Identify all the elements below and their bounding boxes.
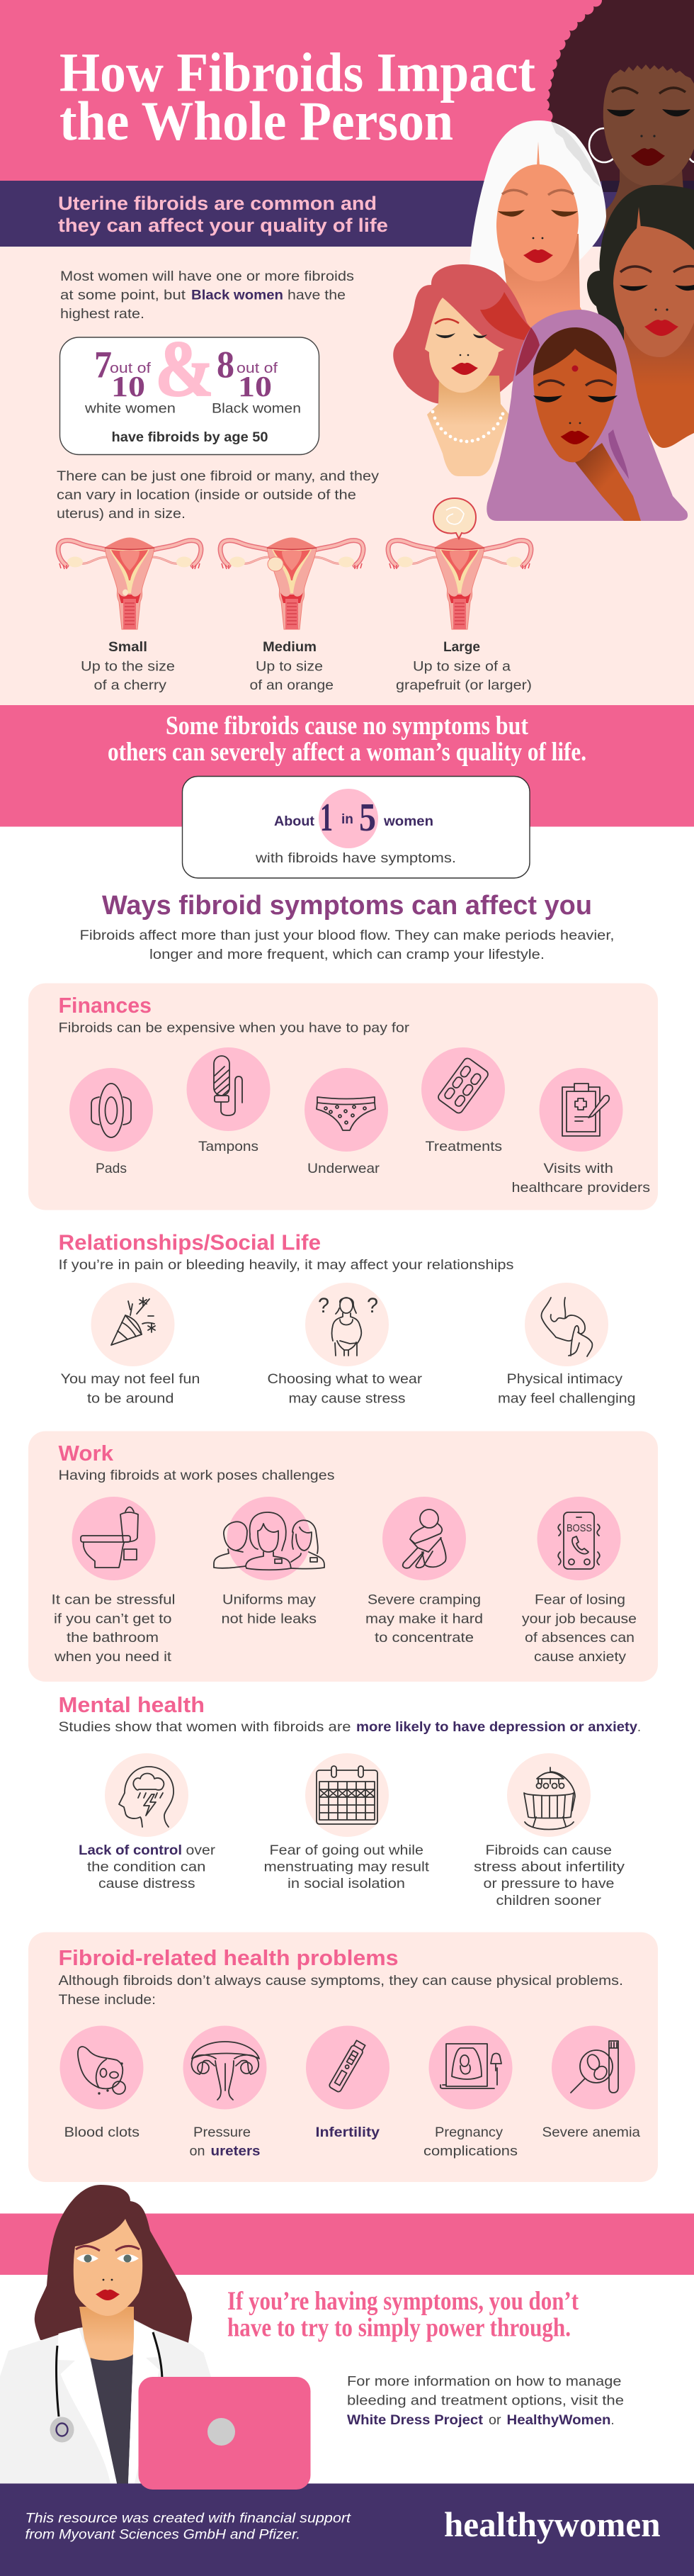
stat box: 1 in 5 women: 5 (359, 796, 376, 840)
icon: uterus and ureters (183, 2025, 266, 2159)
icon: toilet: if you can’t get to (54, 1612, 172, 1627)
stat box: 1 in 5 women: in (341, 811, 353, 827)
icon: person hugging knees: may make it hard (365, 1612, 483, 1627)
purple footer band (0, 2483, 694, 2576)
panel: fibroid-related health problems: Fibroid-related health problems (58, 1945, 398, 1970)
icon: baby crib with mobile: Fibroids can cause (486, 1843, 612, 1858)
background: peach intro section (0, 247, 694, 705)
icon: pads: Pads (96, 1161, 127, 1176)
stat box: 1 in 5 women: women (383, 814, 433, 829)
doctor face (74, 2219, 142, 2316)
panel: work (28, 1432, 658, 1682)
size labels: grapefruit (or larger) (396, 677, 532, 693)
uterus: large fibroid (388, 498, 531, 629)
text: more information: . (610, 2412, 615, 2428)
icon: toilet: It can be stressful (51, 1592, 176, 1607)
footer: funding note: from Myovant Sciences GmbH and Pfizer. (25, 2527, 300, 2543)
icon: treatments: Treatments (425, 1139, 502, 1154)
stat box: 1 in 5 women (183, 777, 530, 878)
icon: toilet: when you need it (54, 1649, 172, 1665)
icon: toilet: the bathroom (67, 1630, 159, 1646)
icon: three people in uniforms: not hide leaks (221, 1612, 317, 1627)
icon: hands and heart (498, 1283, 636, 1406)
size labels: of a cherry (93, 677, 166, 693)
icon: uterus and ureters: Pressure (193, 2125, 251, 2140)
footer: healthywomen logo: healthywomen (444, 2504, 661, 2544)
icon: ultrasound: Pregnancy (435, 2125, 503, 2140)
text: more information (347, 2374, 624, 2428)
icon: baby crib with mobile (474, 1753, 625, 1908)
woman with dark hair (587, 185, 694, 448)
panel: fibroid-related health problems: Although fibroids don’t always cause symptoms, they can cause physical problems. (58, 1973, 623, 1989)
intro text for symptoms (79, 928, 615, 962)
intro text for symptoms: Fibroids affect more than just your blood flow. They can make periods heavier, (79, 928, 615, 943)
woman with afro (547, 0, 694, 244)
subtitle: they can affect your quality of life (58, 215, 388, 236)
stat: Black women: 10 (238, 370, 272, 403)
illustration: doctor with laptop (0, 2185, 310, 2490)
panel: work: Work (58, 1441, 114, 1466)
subtitle: Uterine fibroids are common and (58, 193, 377, 214)
intro text for symptoms: longer and more frequent, which can cramp your lifestyle. (149, 947, 545, 962)
panel: mental health: Studies show that women with fibroids are (58, 1719, 351, 1735)
icon: magnifier and test tube: Severe anemia (542, 2125, 640, 2140)
doctor coat (0, 2319, 220, 2483)
icon: hands and heart: Physical intimacy (507, 1371, 622, 1387)
text: more information: For more information on how to manage (347, 2374, 622, 2390)
icon: tampons (187, 1047, 271, 1154)
doctor lapels (57, 2322, 159, 2483)
icon: test stick: Infertility (316, 2125, 380, 2140)
icon: boss calling on phone: BOSS (567, 1522, 592, 1534)
icon: visits with healthcare providers: Visits with (544, 1161, 613, 1176)
stat: Black women: out of (237, 361, 278, 376)
laptop (139, 2377, 310, 2490)
background: top pink header (0, 0, 694, 181)
icon: woman choosing what to wear: may cause stress (289, 1390, 406, 1406)
intro text: highest rate. (60, 306, 144, 322)
panel: mental health: more likely to have depression or anxiety (356, 1719, 637, 1735)
icon: visits with healthcare providers: healthcare providers (511, 1180, 650, 1196)
stat: Black women: Black women (212, 401, 301, 417)
icon: party popper: to be around (87, 1390, 174, 1406)
icon: hands and heart: may feel challenging (498, 1390, 636, 1406)
icon: underwear (305, 1068, 388, 1176)
doctor shirt (90, 2354, 133, 2483)
icon: woman choosing what to wear (268, 1283, 423, 1406)
pink band: quality of life (0, 705, 694, 826)
icon: boss calling on phone: cause anxiety (534, 1649, 626, 1665)
icon: head with storm cloud (79, 1753, 216, 1891)
icon: tampons: Tampons (198, 1139, 258, 1154)
panel: work: Having fibroids at work poses challenges (58, 1468, 335, 1483)
title: the Whole Person (59, 90, 453, 152)
stat: white women: 10 (111, 370, 145, 403)
callout: power through: If you’re having symptoms, you don’t (227, 2287, 579, 2316)
icon: person hugging knees (365, 1497, 483, 1646)
stat box: 7 and 8 out of 10: have fibroids by age 50 (112, 429, 268, 445)
text: more information: White Dress Project (347, 2412, 484, 2428)
size labels: of an orange (249, 677, 334, 693)
icon: head with storm cloud: the condition can (87, 1860, 205, 1875)
icon: three people in uniforms: Uniforms may (222, 1592, 316, 1607)
stat: white women: 7 (94, 343, 112, 386)
intro text: Black women (191, 288, 283, 303)
size labels: Small (108, 639, 147, 655)
panel: finances: Finances (58, 993, 152, 1018)
icon: person hugging knees: to concentrate (375, 1630, 474, 1646)
heading: ways fibroid symptoms can affect you: Ways fibroid symptoms can affect you (102, 891, 592, 921)
pink band: quality of life: Some fibroids cause no symptoms but (166, 712, 529, 741)
text: more information: HealthyWomen (507, 2412, 610, 2428)
text: more information: or (489, 2412, 501, 2428)
text: more information: bleeding and treatment options, visit the (347, 2392, 624, 2408)
size labels: Up to the size (81, 659, 175, 675)
icon: woman choosing what to wear: ? (367, 1294, 378, 1317)
intro text: have the (288, 288, 346, 303)
stat box: 1 in 5 women: with fibroids have symptoms. (255, 850, 456, 866)
title (59, 41, 535, 152)
icon: baby crib with mobile: children sooner (496, 1893, 602, 1908)
doctor hair (35, 2185, 192, 2343)
stat: white women: white women (84, 401, 176, 417)
icon: visits with healthcare providers (511, 1068, 650, 1196)
icon: test stick (306, 2025, 389, 2140)
icon: person hugging knees: Severe cramping (368, 1592, 481, 1607)
pink band: quality of life: others can severely affect a woman’s quality of life. (108, 738, 586, 767)
doctor neck (79, 2307, 134, 2361)
icon: boss calling on phone: of absences can (525, 1630, 635, 1646)
icon: boss calling on phone: your job because (522, 1612, 637, 1627)
icon: ultrasound (423, 2025, 518, 2159)
subtitle (58, 193, 388, 236)
icon: head with storm cloud: Lack of control (79, 1843, 182, 1858)
size labels (81, 639, 532, 693)
intro text: at some point, but (60, 288, 186, 303)
intro text (60, 269, 354, 322)
panel: mental health: Mental health (58, 1692, 205, 1717)
icon: underwear: Underwear (307, 1161, 380, 1176)
icon: calendar with crossed days: in social isolation (288, 1876, 405, 1891)
size labels: Up to size (256, 659, 323, 675)
woman with purple headscarf (487, 310, 688, 521)
icon: treatments (421, 1047, 505, 1154)
icon: magnifier and test tube (542, 2025, 640, 2140)
woman with white hair (470, 120, 606, 340)
panel: mental health: . (637, 1719, 641, 1735)
size labels: Medium (263, 639, 317, 655)
stat box: 1 in 5 women: About (274, 814, 315, 829)
doctor facial features (76, 2246, 140, 2300)
icon: calendar with crossed days (263, 1753, 430, 1891)
panel: finances: Fibroids can be expensive when you have to pay for (58, 1020, 410, 1036)
uterus: small fibroid (58, 538, 201, 629)
footer: funding note (25, 2512, 351, 2543)
panel: relationships / social life: If you’re in pain or bleeding heavily, it may affect your relationships (58, 1257, 514, 1273)
icon: ultrasound: complications (423, 2143, 518, 2159)
pink band behind doctor (0, 2214, 694, 2275)
icon: party popper (61, 1283, 200, 1406)
panel: relationships / social life: Relationships/Social Life (58, 1230, 321, 1254)
panel: fibroid-related health problems (28, 1932, 658, 2182)
callout: power through (227, 2287, 579, 2343)
icon: woman choosing what to wear: ? (318, 1294, 329, 1317)
text: number and size of fibroids: There can be just one fibroid or many, and they (57, 468, 379, 484)
stat box: 7 and 8 out of 10 (59, 325, 319, 455)
panel: finances (28, 984, 658, 1210)
title: How Fibroids Impact (59, 41, 535, 103)
icon: head with storm cloud: over (186, 1843, 216, 1858)
icon: party popper: You may not feel fun (61, 1371, 200, 1387)
stat: white women: out of (110, 361, 152, 376)
illustration: group of five women (393, 0, 694, 521)
icon: baby crib with mobile: stress about infertility (474, 1860, 625, 1875)
panel: mental health (58, 1692, 641, 1908)
icon: woman choosing what to wear: Choosing what to wear (268, 1371, 423, 1387)
stat: white women (84, 343, 176, 417)
stat: Black women: 8 (217, 343, 234, 386)
panel: relationships / social life (58, 1230, 636, 1406)
icon: head with storm cloud: cause distress (98, 1876, 195, 1891)
icon: toilet (51, 1497, 176, 1665)
text: number and size of fibroids: can vary in location (inside or outside of the (57, 488, 356, 503)
icon: boss calling on phone: Fear of losing (535, 1592, 625, 1607)
size labels: Up to size of a (413, 659, 511, 675)
uterus: medium fibroid (220, 538, 363, 629)
icon: boss calling on phone (522, 1497, 637, 1665)
icon: pads (69, 1068, 153, 1176)
icon: blood clots (59, 2025, 143, 2140)
footer: funding note: This resource was created with financial support (25, 2512, 351, 2526)
size labels: Large (443, 639, 480, 655)
icon: uterus and ureters: on (190, 2143, 205, 2159)
stethoscope (50, 2332, 162, 2442)
text: number and size of fibroids (57, 468, 379, 522)
stat box: 1 in 5 women: 1 (320, 796, 333, 840)
icon: blood clots: Blood clots (64, 2125, 140, 2140)
stat: Black women (212, 343, 301, 417)
text: number and size of fibroids: uterus) and in size. (57, 506, 186, 522)
icon: uterus and ureters: ureters (211, 2143, 261, 2159)
intro text: Most women will have one or more fibroids (60, 269, 354, 284)
woman with red hair and pearl necklace (393, 264, 540, 476)
icon: calendar with crossed days: menstruating may result (263, 1860, 430, 1875)
icon: three people in uniforms (214, 1497, 324, 1627)
background: purple subtitle band (0, 181, 694, 247)
ampersand: & (155, 325, 214, 413)
icon: baby crib with mobile: or pressure to have (483, 1876, 615, 1891)
panel: fibroid-related health problems: These include: (58, 1992, 156, 2008)
callout: power through: have to try to simply power through. (227, 2313, 571, 2343)
icon: calendar with crossed days: Fear of going out while (269, 1843, 423, 1858)
